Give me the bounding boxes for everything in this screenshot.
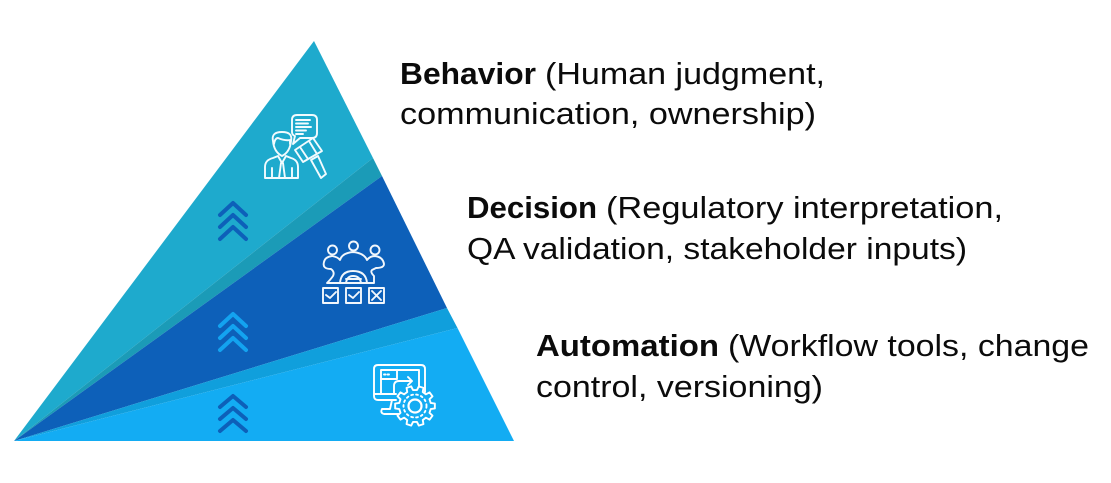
icon: chevrons behavior	[220, 203, 246, 239]
text: behavior: Behavior	[400, 56, 536, 91]
band: decision shadow	[14, 308, 458, 441]
icon: person with gavel and speech bubble	[265, 115, 326, 178]
icon: monitor with gear	[374, 365, 435, 426]
text: decision	[467, 190, 1003, 266]
tier: decision	[14, 176, 447, 441]
text: decision: Decision	[467, 190, 597, 225]
text: behavior: (Human judgment,	[545, 56, 825, 91]
text: automation: Automation	[536, 328, 719, 363]
pyramid	[14, 41, 514, 441]
text: behavior: communication, ownership)	[400, 96, 816, 131]
icon: chevrons automation	[220, 396, 246, 431]
tier: automation	[14, 328, 514, 441]
text: decision: (Regulatory interpretation,	[606, 190, 1003, 225]
icon: chevrons decision	[220, 314, 246, 350]
text: automation	[536, 328, 1089, 404]
text: automation: (Workflow tools, change	[728, 328, 1089, 363]
band: behavior shadow	[14, 158, 382, 441]
text: behavior	[400, 56, 825, 131]
icon: team gear and checkboxes	[323, 242, 384, 303]
tier: behavior	[14, 41, 373, 441]
text: automation: control, versioning)	[536, 369, 823, 404]
text: decision: QA validation, stakeholder inputs)	[467, 231, 967, 266]
